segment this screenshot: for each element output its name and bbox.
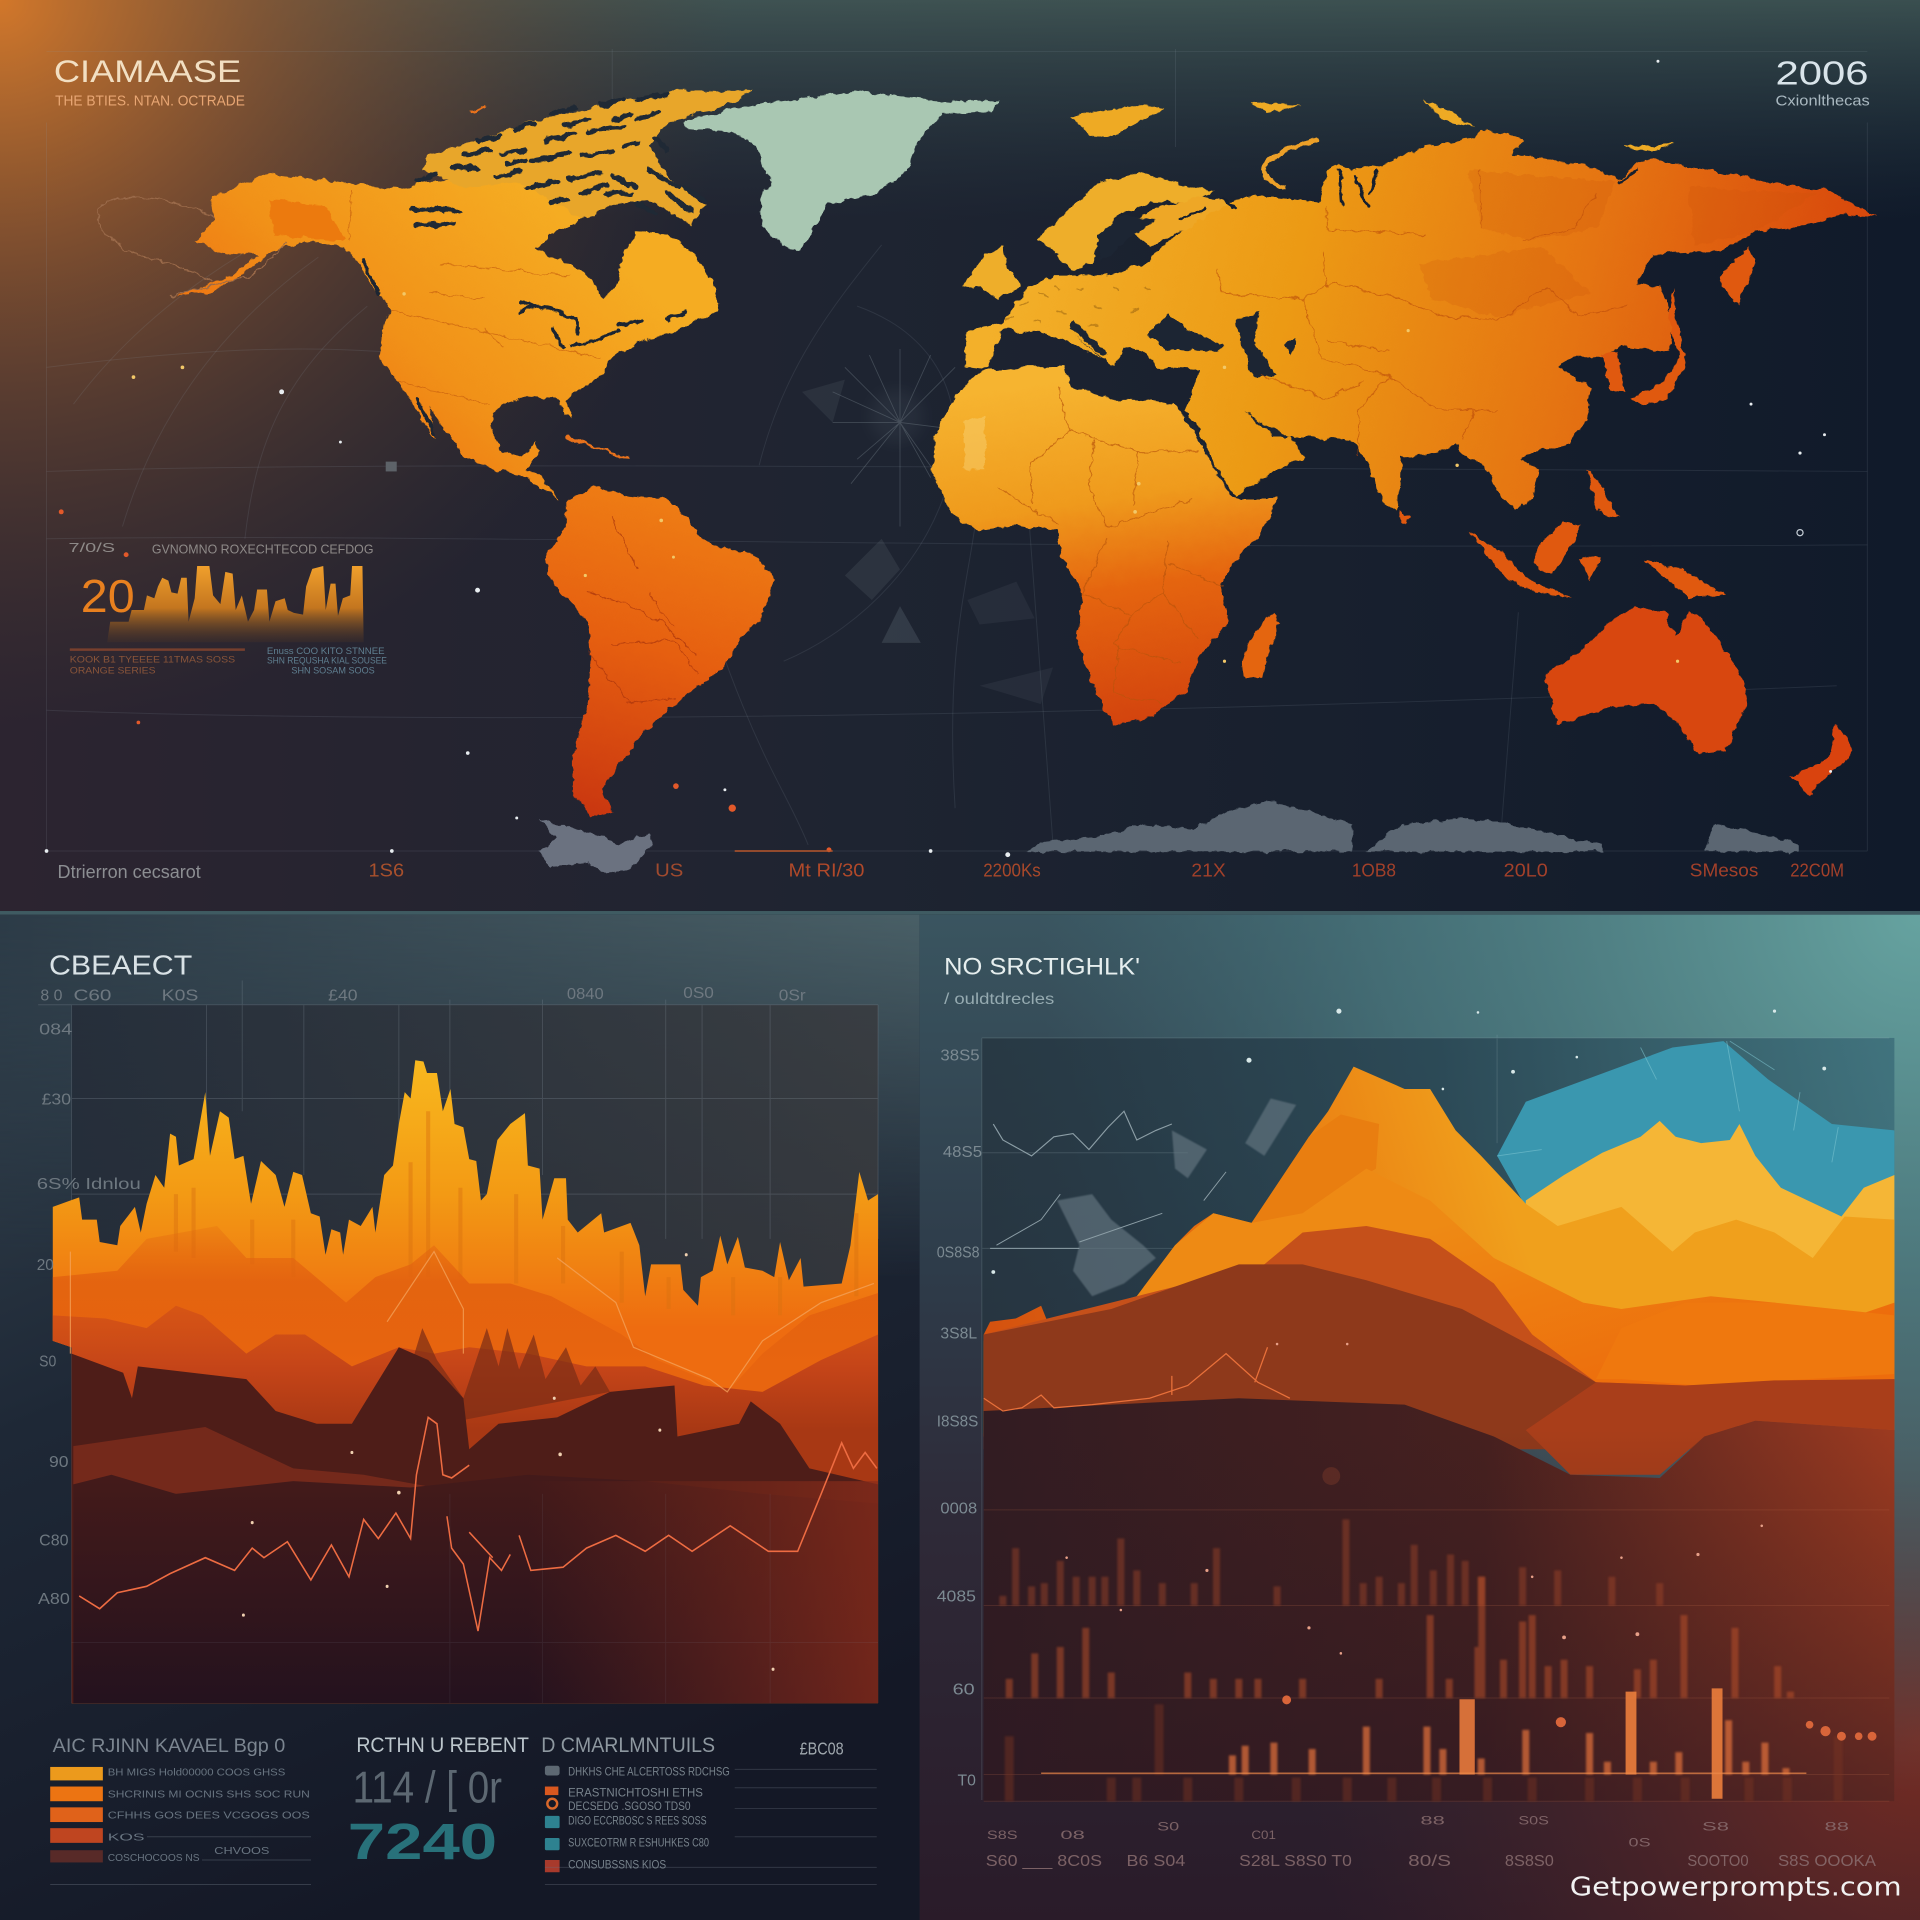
chart axis labels: right panel: T0 xyxy=(958,1772,976,1789)
plot backdrop xyxy=(72,1005,878,1703)
map axis labels: 20L0 xyxy=(1504,860,1548,881)
continent: Africa xyxy=(932,367,1278,726)
panel title: NO SRCTIGHLK' xyxy=(944,954,1140,981)
mini chart footer text: KOOK B1 TYEEEE 11TMAS SOSS xyxy=(70,654,235,664)
legend descriptions: SHCRINIS MI OCNIS SHS SOC RUN xyxy=(108,1790,310,1801)
mini chart footer text: ORANGE SERIES xyxy=(70,665,156,675)
legend swatches xyxy=(50,1767,103,1862)
chart x-axis labels: right panel: 08 xyxy=(1060,1828,1085,1842)
chart x-axis labels: right panel: 0S xyxy=(1629,1836,1651,1850)
chart axis labels: 0840 xyxy=(567,986,604,1003)
mini lines xyxy=(990,1172,1226,1248)
mini chart footer text xyxy=(70,654,235,675)
arctic fissures xyxy=(410,94,704,226)
ember sparkles xyxy=(1065,1343,1763,1655)
chart axis labels: 0Sr xyxy=(779,987,806,1004)
continent: Canadian Arctic islands xyxy=(422,91,753,226)
area layer: deep base xyxy=(73,1475,878,1703)
chart x-axis labels: right panel: SOOTO0 xyxy=(1687,1853,1749,1870)
subtitle: THE BTIES. NTAN. OCTRADE xyxy=(55,93,245,109)
map axis labels: 21X xyxy=(1191,860,1226,881)
mini chart right notes: SHN REQUSHA KIAL SOUSEE xyxy=(267,656,387,666)
map sparkles xyxy=(45,60,1832,857)
map borders: North America xyxy=(349,191,600,405)
mini chart bars xyxy=(107,566,364,642)
chart x-axis labels: right panel: S8S xyxy=(987,1828,1018,1842)
spike streaks xyxy=(176,1111,856,1315)
chart x-axis labels: right panel: 8S8S0 xyxy=(1505,1853,1554,1870)
area layer: red orange xyxy=(53,1306,878,1703)
chart x-axis labels: right panel: S0S xyxy=(1518,1813,1549,1827)
area layer: blue ridge xyxy=(1497,1041,1894,1226)
continent: Antarctica coast xyxy=(1027,801,1799,852)
continent: Eurasia xyxy=(966,129,1875,510)
list icons xyxy=(545,1766,560,1872)
Europe speckle xyxy=(1006,287,1151,326)
list descriptions: CONSUBSSNS KIOS xyxy=(568,1859,666,1872)
icon: radial starburst ocean ornament xyxy=(802,349,1053,704)
Siberia plate facets xyxy=(1419,170,1817,317)
continent: Madagascar xyxy=(1242,613,1280,680)
mini bar chart xyxy=(69,540,387,675)
map axis labels: SMesos xyxy=(1690,860,1758,881)
chart axis labels: 90 xyxy=(49,1454,69,1471)
bottom shade xyxy=(984,1430,1894,1801)
fine grid on base xyxy=(72,1494,878,1703)
small line xyxy=(984,1347,1290,1411)
world map: Americas xyxy=(98,91,998,874)
chart axis labels: 6S% Idnlou xyxy=(37,1176,141,1193)
area layer: dark base xyxy=(984,1398,1894,1801)
chart axis labels: right panel xyxy=(937,1047,982,1789)
smoke cloud ornament xyxy=(1057,1099,1296,1296)
list value heading: £BC08 xyxy=(800,1739,844,1759)
continent: United Kingdom xyxy=(963,246,1021,299)
chart x-axis labels: right panel xyxy=(986,1813,1876,1870)
chart axis labels: right panel: 0S8S8 xyxy=(937,1245,980,1262)
small line sparkline xyxy=(993,1111,1172,1156)
panel subtitle: / ouldtdrecles xyxy=(944,991,1054,1008)
chart x-axis labels: right panel: B6 S04 xyxy=(1127,1853,1185,1870)
heading: CIAMAASE xyxy=(54,53,241,89)
chart axis labels: £40 xyxy=(328,987,358,1004)
continent: Iceland and Svalbard xyxy=(1070,100,1676,152)
legend rules xyxy=(50,1837,311,1884)
area layer: yellow skyline xyxy=(53,1060,878,1703)
heading: bottom right xyxy=(944,954,1140,1008)
chart x-axis labels: right panel: S8S OOOKA xyxy=(1778,1853,1876,1870)
plot backdrop xyxy=(982,1038,1894,1433)
chart sparkles xyxy=(242,1253,775,1671)
baseline glow xyxy=(1041,1772,1806,1774)
area layer: red orange xyxy=(984,1226,1894,1437)
bar row 2 xyxy=(1009,1577,1790,1698)
area layer: bright orange xyxy=(984,1169,1894,1437)
line series: pale orange xyxy=(70,1252,874,1392)
legend descriptions: COSCHOCOOS NS xyxy=(108,1853,200,1864)
chart axis labels: right panel: 0008 xyxy=(940,1500,977,1517)
stat value grey: 114 / [ 0r xyxy=(353,1763,502,1812)
legend: left colour key xyxy=(50,1735,311,1884)
chart x-axis labels: right panel: 88 xyxy=(1824,1820,1849,1834)
chart axis labels: 084 xyxy=(39,1022,72,1039)
chart: mountain area chart with bars xyxy=(982,1009,1894,1801)
title xyxy=(54,53,245,109)
Caribbean islands xyxy=(471,107,628,459)
stat value teal: 7240 xyxy=(348,1812,497,1870)
list heading: D CMARLMNTUILS xyxy=(541,1734,715,1757)
world map: Eurasia, Africa, Oceania xyxy=(932,100,1875,852)
continent: Finland xyxy=(1120,196,1229,246)
bar row 3 xyxy=(1232,1720,1786,1774)
highlight axis segment xyxy=(735,850,833,852)
chart axis labels: C60 xyxy=(73,987,112,1004)
Sahara highlight xyxy=(963,416,984,469)
map axis labels: 2200Ks xyxy=(983,860,1041,881)
legend descriptions: CFHHS GOS DEES VCGOGS OOS xyxy=(108,1810,310,1821)
legend descriptions: CHVOOS xyxy=(214,1846,270,1857)
grid rows xyxy=(984,1510,1889,1801)
area layer: rust xyxy=(984,1264,1894,1449)
map axis labels: Mt RI/30 xyxy=(789,860,864,881)
chart axis labels xyxy=(37,985,806,1608)
legend title: AIC RJINN KAVAEL Bgp 0 xyxy=(53,1735,285,1757)
area layer: dark mountains xyxy=(72,1347,878,1703)
map axis labels: 1OB8 xyxy=(1352,860,1396,881)
area layer: brown band xyxy=(73,1427,434,1494)
continent: South America xyxy=(545,487,776,816)
map axis labels: US xyxy=(655,860,683,881)
chart axis labels: C80 xyxy=(39,1532,69,1549)
mini chart footer rules xyxy=(70,649,245,651)
map grid lines xyxy=(47,49,1867,851)
chart axis labels: A80 xyxy=(38,1591,70,1608)
mini chart headings: GVNOMNO ROXECHTECOD CEFDOG xyxy=(152,541,373,556)
red right glow xyxy=(528,1481,878,1703)
bar row 1 xyxy=(1003,1519,1660,1606)
area layer: yellow ridge xyxy=(1526,1121,1894,1366)
area layer: orange mountain xyxy=(984,1067,1894,1430)
continent: New Zealand xyxy=(1791,724,1854,795)
map axis labels: Dtrierron cecsarot xyxy=(58,861,201,882)
year label xyxy=(1776,55,1870,109)
legend descriptions: KOS xyxy=(108,1832,145,1843)
continent: Australia xyxy=(1545,607,1747,754)
alaska highlight xyxy=(269,199,346,240)
map axis labels: 1S6 xyxy=(369,860,404,881)
area layer: mid facet xyxy=(1252,1114,1379,1223)
panel: top world map background xyxy=(0,0,1920,915)
tall bar b xyxy=(1631,1688,1717,1799)
chart x-axis labels: right panel: S28L S8S0 T0 xyxy=(1239,1853,1352,1870)
islands: Southeast Asia and Japan xyxy=(1401,246,1756,598)
island: Novaya Zemlya xyxy=(1265,140,1318,188)
list descriptions: DECSEDG .SGOSO TDS0 xyxy=(568,1800,691,1813)
chart axis labels: 8 0 xyxy=(40,987,63,1004)
map axis labels xyxy=(58,860,1844,882)
mini chart headings: 7/0/S xyxy=(69,540,115,555)
inland lakes xyxy=(361,258,686,434)
mini chart right notes xyxy=(267,646,387,675)
list descriptions: ERASTNICHTOSHI ETHS xyxy=(568,1786,703,1799)
legend descriptions: BH MIGS Hold00000 COOS GHSS xyxy=(108,1768,286,1779)
map borders: South America xyxy=(588,516,698,704)
seas: Black, Caspian, Aral, Gulf xyxy=(1070,214,1297,499)
under bars xyxy=(1009,1704,1838,1801)
continent: Greenland xyxy=(686,91,998,249)
area layer: red wedge xyxy=(1526,1379,1894,1475)
chart x-axis labels: right panel: S0 xyxy=(1157,1820,1179,1834)
mini chart headings xyxy=(69,540,373,556)
drip spikes xyxy=(411,1328,610,1430)
area layer: bright wedge xyxy=(1596,1303,1894,1385)
tall bars xyxy=(1455,1699,1479,1774)
list descriptions xyxy=(568,1766,730,1872)
chart axis labels: right panel: 60 xyxy=(953,1682,975,1699)
heading: bottom left: CBEAECT xyxy=(49,950,192,981)
line series: red xyxy=(79,1417,877,1631)
chart axis labels: right panel: 48S5 xyxy=(943,1144,982,1161)
chart x-axis labels: right panel: 88 xyxy=(1420,1813,1445,1827)
chart axis labels: 20 xyxy=(37,1257,54,1274)
mini chart right notes: SHN SOSAM SOOS xyxy=(291,665,375,675)
chart axis labels: £30 xyxy=(42,1091,71,1108)
chart axis labels: 0S0 xyxy=(683,985,714,1002)
mini chart right notes: Enuss COO KITO STNNEE xyxy=(267,646,384,656)
chart axis labels: right panel: I8S8S xyxy=(937,1414,978,1431)
chart axis labels: right panel: 38S5 xyxy=(940,1047,980,1064)
legend descriptions xyxy=(108,1768,310,1864)
chart axis labels: K0S xyxy=(162,987,198,1004)
continent: Antarctic Peninsula xyxy=(539,818,652,874)
grid lines xyxy=(38,981,878,1703)
dot trail xyxy=(1282,1467,1877,1741)
panel: bottom right background xyxy=(920,915,1920,1920)
chart axis labels: right panel: 4085 xyxy=(937,1589,976,1606)
year caption: Cxionlthecas xyxy=(1776,93,1870,109)
list rules xyxy=(545,1769,877,1884)
continent: Scandinavia xyxy=(1037,173,1214,270)
chart x-axis labels: right panel: S8 xyxy=(1702,1820,1729,1834)
panel: bottom left background xyxy=(0,914,920,1678)
continent: North America xyxy=(178,173,719,501)
ridge cracks xyxy=(1497,1041,1838,1162)
grid lines xyxy=(982,1035,1889,1800)
stat block: centre xyxy=(348,1734,529,1870)
map borders: Africa xyxy=(997,387,1223,704)
list descriptions: SUXCEOTRM R ESHUHKES C80 xyxy=(568,1837,709,1850)
chart x-axis labels: right panel: C01 xyxy=(1251,1828,1276,1842)
map axis labels: 22C0M xyxy=(1790,860,1844,881)
area layer: bright orange xyxy=(53,1226,878,1703)
Alaska route lines xyxy=(98,197,288,296)
legend: right metric list xyxy=(541,1734,877,1884)
mini chart big value: 20 xyxy=(81,570,135,622)
list descriptions: DIGO ECCRBOSC S REES SOSS xyxy=(568,1814,707,1827)
stat heading: RCTHN U REBENT xyxy=(356,1734,529,1757)
sparkles xyxy=(991,1009,1826,1274)
list descriptions: DHKHS CHE ALCERTOSS RDCHSG xyxy=(568,1766,730,1779)
year value: 2006 xyxy=(1776,55,1869,92)
map borders: Asia xyxy=(1217,170,1627,457)
chart x-axis labels: right panel: 80/S xyxy=(1408,1853,1451,1870)
watermark: Getpowerprompts.com xyxy=(1570,1873,1902,1903)
chart: layered area chart xyxy=(38,981,878,1703)
chart axis labels: right panel: 3S8L xyxy=(940,1325,977,1342)
chart axis labels: S0 xyxy=(39,1354,56,1371)
Arctic coast notches xyxy=(1180,170,1637,220)
chart x-axis labels: right panel: S60 ___ 8C0S xyxy=(986,1853,1102,1870)
